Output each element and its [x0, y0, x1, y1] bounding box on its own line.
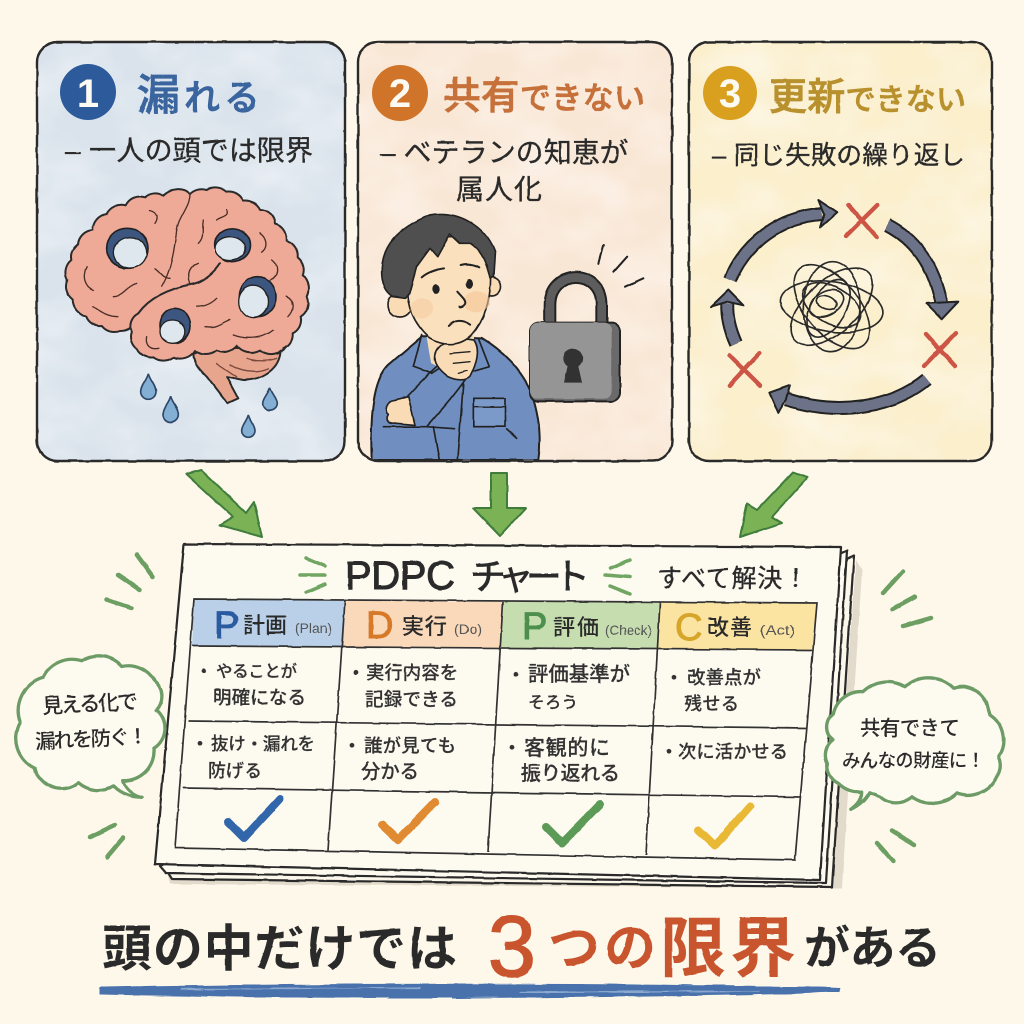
- icon: cycle of failure arrows: [711, 200, 958, 413]
- Do cells: 分かる: [361, 761, 419, 783]
- subtext: veteran knowledge: – ベテランの知恵が: [380, 137, 628, 168]
- main message: 限界: [660, 911, 796, 985]
- badge 2: [372, 65, 428, 121]
- bubble text: [35, 691, 149, 754]
- column head: Act: C: [675, 607, 702, 649]
- subtext: second line: 属人化: [456, 174, 542, 205]
- Plan cells: やることが: [216, 661, 298, 681]
- bubble text: 見える化で: [42, 691, 139, 718]
- heading: 更新できない: 更新できない: [769, 77, 966, 119]
- Act cells: •: [666, 742, 672, 761]
- Check cells: そろう: [528, 693, 578, 712]
- main message: 頭の中だけでは: [102, 921, 457, 977]
- Plan cells: 明確になる: [213, 687, 306, 708]
- green accents: [300, 558, 630, 594]
- Check cells: 評価基準が: [528, 663, 630, 686]
- column head: Plan: (Plan): [295, 620, 332, 636]
- accent lines: right bottom: [877, 831, 914, 861]
- badge 2: 2: [389, 72, 411, 116]
- main message: つの: [548, 920, 656, 978]
- subtext: repeating failures: – 同じ失敗の繰り返し: [712, 142, 965, 170]
- Check cells: •: [513, 665, 519, 684]
- column head: Act: 改善: [707, 615, 752, 640]
- chart grid: [175, 599, 817, 860]
- speech bubble: left: [16, 656, 165, 797]
- main message: [102, 899, 941, 995]
- column head: Check: (Check): [605, 622, 652, 638]
- Do cells: 記録できる: [365, 689, 458, 710]
- column head: Plan: P: [214, 605, 239, 647]
- bubble text: みんなの財産に！: [842, 750, 985, 771]
- heading: 共有できない: 共有できない: [443, 76, 645, 118]
- panel 2: cannot share: [358, 42, 672, 461]
- column head: Check: [522, 606, 652, 648]
- chart title: PDPC: [345, 554, 455, 598]
- column head: Check: P: [522, 606, 547, 648]
- arrow: panel 1 to chart: [186, 470, 262, 537]
- badge 3: [703, 66, 757, 120]
- chart sheet stack: [155, 544, 862, 888]
- Plan cells: •: [197, 734, 203, 753]
- Do cells: [349, 662, 458, 783]
- Plan cells: 抜け・漏れを: [211, 734, 315, 754]
- subtext: limit of one head: – 一人の頭では限界: [65, 135, 313, 166]
- accent lines: left top: [107, 555, 153, 608]
- bubble text: 漏れを防ぐ！: [35, 725, 149, 754]
- bubble text: [842, 717, 985, 771]
- column head: Plan: 計画: [243, 613, 287, 638]
- main message: がある: [804, 922, 941, 974]
- chart header cells: [192, 599, 817, 650]
- icon: brain with holes and drops: [65, 187, 308, 437]
- Act cells: 改善点が: [687, 667, 761, 688]
- chart title: [345, 554, 590, 598]
- panel 1: leaks: [37, 42, 345, 461]
- column head: Act: [675, 607, 795, 649]
- badge 1: [60, 64, 116, 120]
- Plan cells: •: [201, 662, 207, 681]
- Check cells: 振り返れる: [521, 762, 620, 785]
- speech bubble: right: [825, 678, 1003, 809]
- arrow: panel 2 to chart: [473, 473, 526, 536]
- callout: solves everything: すべて解決！: [657, 565, 808, 593]
- badge 3: 3: [719, 72, 741, 116]
- check marks: [228, 799, 750, 846]
- Plan cells: 防げる: [208, 761, 262, 781]
- Plan cells: [197, 661, 315, 781]
- Check cells: 客観的に: [524, 737, 610, 760]
- chart title: チャート: [470, 556, 590, 597]
- accent lines: left bottom: [90, 825, 123, 857]
- column head: Plan: [214, 605, 332, 647]
- accent lines: right top: [883, 571, 931, 626]
- column head: Act: (Act): [760, 622, 795, 638]
- main message: 3: [488, 899, 536, 995]
- Do cells: 実行内容を: [366, 662, 458, 683]
- badge 1: 1: [77, 72, 99, 116]
- arrow: panel 3 to chart: [740, 472, 808, 537]
- underline stroke: [102, 986, 840, 996]
- icon: worried worker: [371, 214, 540, 460]
- icon: padlock: [530, 245, 643, 401]
- Do cells: •: [353, 663, 359, 682]
- Act cells: [666, 667, 788, 762]
- Act cells: •: [671, 668, 677, 687]
- Act cells: 残せる: [684, 693, 739, 714]
- heading: 漏れる: 漏れる: [137, 72, 260, 120]
- Do cells: 誰が見ても: [364, 735, 456, 756]
- column head: Do: 実行: [402, 614, 447, 639]
- bubble text: 共有できて: [860, 717, 960, 740]
- Check cells: [509, 663, 630, 785]
- column head: Do: [366, 605, 482, 647]
- column head: Do: (Do): [454, 621, 482, 637]
- Act cells: 次に活かせる: [678, 741, 788, 762]
- column head: Check: 評価: [553, 615, 599, 640]
- Check cells: •: [509, 738, 515, 757]
- column head: Do: D: [366, 605, 393, 647]
- panel 3: cannot update: [689, 42, 992, 461]
- Do cells: •: [349, 736, 355, 755]
